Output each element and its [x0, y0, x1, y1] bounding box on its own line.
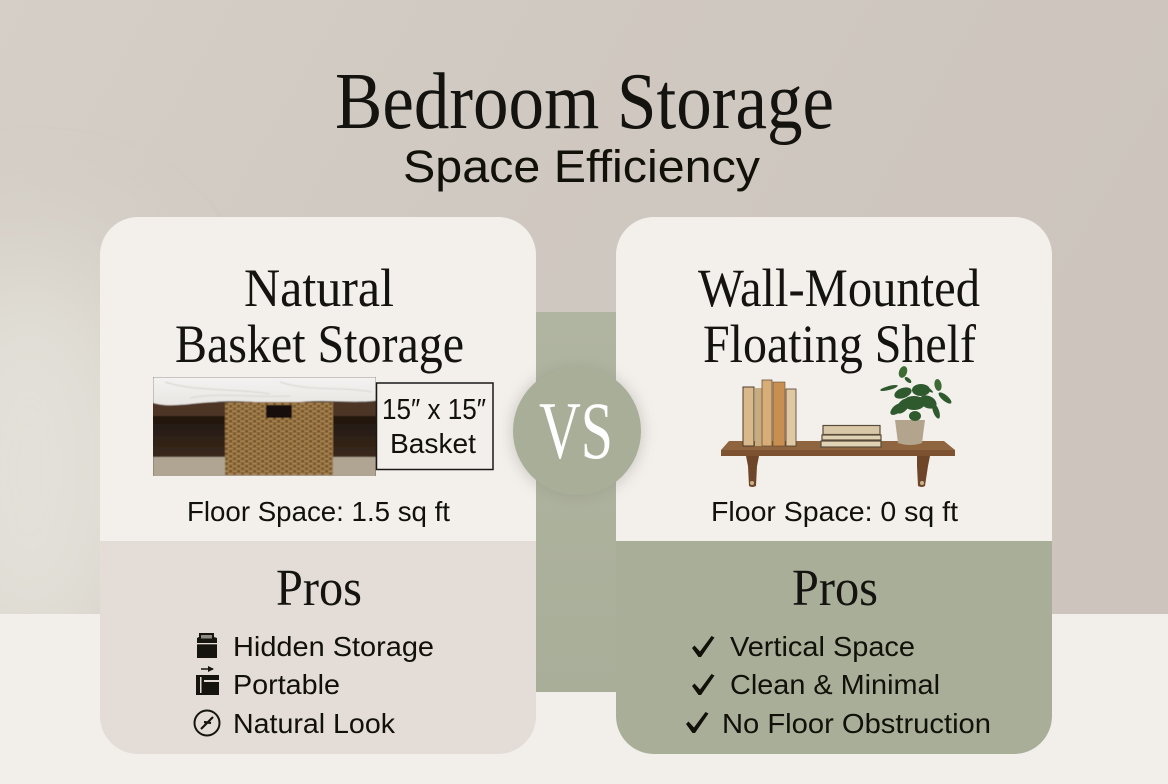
pros heading: Pros: [276, 560, 362, 617]
centre connecting band: [536, 312, 616, 692]
icon: storage case: [197, 633, 217, 658]
icon: check: [692, 674, 714, 695]
pro: natural look: Natural Look: [233, 708, 396, 739]
card lower section: [100, 541, 536, 754]
title: [335, 58, 834, 192]
basket size label: Basket: [390, 428, 476, 459]
pot: [895, 420, 925, 445]
stacked books: [823, 426, 880, 434]
photo: basket under bed: [153, 377, 376, 477]
card background: [100, 217, 536, 754]
title: Bedroom Storage: [335, 58, 834, 146]
card heading: Basket Storage: [175, 314, 464, 374]
icon: circled leaf: [194, 710, 220, 736]
pros heading: Pros: [792, 560, 878, 617]
VS badge: VS: [539, 385, 613, 476]
basket size label: [376, 383, 493, 470]
card heading: Natural: [244, 258, 394, 318]
pro: clean and minimal: Clean & Minimal: [730, 669, 940, 700]
upright books: [743, 387, 754, 446]
floor space value: Floor Space: 1.5 sq ft: [187, 496, 450, 527]
brackets: [746, 456, 759, 487]
card heading: Floating Shelf: [703, 314, 976, 374]
VS badge: [511, 366, 643, 498]
icon: portable folder with arrow: [196, 666, 219, 695]
pro: hidden storage: Hidden Storage: [233, 631, 434, 662]
pro: no floor obstruction: No Floor Obstruction: [722, 708, 991, 739]
pro: vertical space: Vertical Space: [730, 631, 915, 662]
basket size label: 15″ x 15″: [382, 394, 486, 426]
panel: wall-mounted floating shelf: [616, 217, 1052, 754]
left wall light wash: [0, 258, 100, 614]
icon: check: [686, 712, 708, 733]
plant: [880, 365, 953, 421]
illustration: shelf with books and plant: [721, 365, 955, 487]
icon: check: [692, 636, 714, 657]
card lower section: [616, 541, 1052, 754]
card heading: Wall-Mounted: [698, 258, 980, 318]
card heading: [698, 258, 980, 374]
background wall: [0, 0, 1168, 614]
floor space value: Floor Space: 0 sq ft: [711, 496, 958, 527]
pro: portable: [196, 666, 340, 700]
shelf board: [721, 441, 955, 456]
panel: natural basket storage: [100, 217, 536, 754]
floor: [0, 614, 1168, 784]
pro: portable: Portable: [233, 669, 340, 700]
card background: [616, 217, 1052, 754]
subtitle: Space Efficiency: [403, 141, 761, 192]
card heading: [175, 258, 464, 374]
